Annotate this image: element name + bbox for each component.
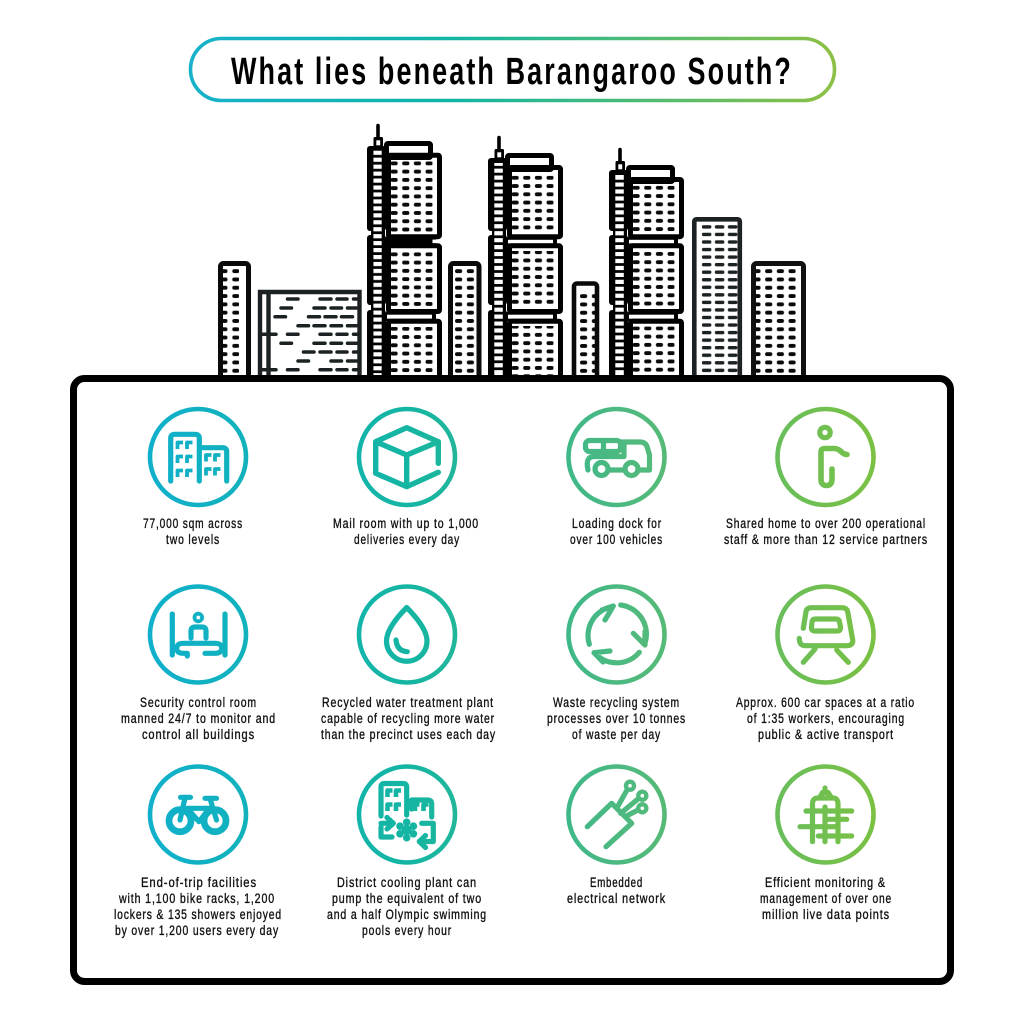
caption: by over 1,200 users every day [115, 923, 279, 938]
caption: 77,000 sqm across [143, 516, 243, 531]
item: waste recycling [547, 586, 686, 742]
caption: End-of-trip facilities [141, 875, 257, 890]
icon: water drop [386, 608, 427, 661]
item: district cooling [327, 766, 487, 938]
caption [327, 875, 487, 938]
title pill [190, 38, 834, 100]
icon: recycling arrows [588, 605, 646, 663]
item: end-of-trip facilities [114, 766, 282, 938]
caption: Mail room with up to 1,000 [333, 516, 479, 531]
caption [760, 875, 892, 922]
caption: Security control room [140, 695, 257, 710]
caption [321, 695, 496, 742]
icon: snowflake [396, 818, 417, 842]
caption: pump the equivalent of two [332, 891, 482, 906]
caption [333, 516, 479, 547]
icon: bicycle [169, 797, 226, 832]
building A [220, 264, 248, 378]
icon: box [376, 428, 438, 487]
item: electrical network [567, 766, 666, 906]
caption: Embedded [590, 875, 643, 890]
caption: management of over one [760, 891, 892, 906]
caption: electrical network [567, 891, 666, 906]
caption: staff & more than 12 service partners [724, 532, 928, 547]
caption: Recycled water treatment plant [322, 695, 494, 710]
title: What lies beneath Barangaroo South? [231, 51, 793, 93]
tower 3 [609, 150, 682, 381]
building D [574, 284, 598, 378]
icon: buildings [171, 434, 227, 481]
caption [547, 695, 686, 742]
icon: train [799, 608, 853, 662]
icon: cables [587, 782, 646, 847]
caption: District cooling plant can [337, 875, 477, 890]
building F [753, 264, 804, 378]
caption: Approx. 600 car spaces at a ratio [736, 695, 915, 710]
icon: building with data lines [800, 788, 852, 842]
caption: capable of recycling more water [321, 711, 495, 726]
caption: and a half Olympic swimming [327, 907, 487, 922]
icon: person [820, 427, 847, 486]
caption: over 100 vehicles [570, 532, 663, 547]
main panel [74, 378, 950, 982]
caption [114, 875, 282, 938]
caption: with 1,100 bike racks, 1,200 [118, 891, 275, 906]
caption [724, 516, 928, 547]
item: security control room [121, 586, 276, 742]
item: water treatment [321, 586, 496, 742]
item: floor area [143, 409, 246, 547]
icon: security desk [172, 614, 225, 656]
tower 1 [367, 126, 440, 381]
caption [143, 516, 243, 547]
caption: Efficient monitoring & [765, 875, 886, 890]
building B with scattered windows [260, 292, 360, 378]
building E [694, 219, 740, 379]
building C [450, 264, 479, 378]
icon: truck [586, 440, 650, 476]
caption [736, 695, 915, 742]
caption: than the precinct uses each day [321, 727, 496, 742]
caption: Waste recycling system [553, 695, 680, 710]
caption [570, 516, 663, 547]
icon: cooling plant [381, 784, 433, 848]
tower 2 [488, 138, 560, 381]
caption: deliveries every day [354, 532, 460, 547]
caption: of waste per day [572, 727, 661, 742]
caption [567, 875, 666, 906]
caption: of 1:35 workers, encouraging [747, 711, 905, 726]
caption: control all buildings [142, 727, 255, 742]
caption: Shared home to over 200 operational [726, 516, 926, 531]
item: operational staff [724, 409, 928, 547]
caption: pools every hour [362, 923, 452, 938]
caption: million live data points [762, 907, 890, 922]
item: car spaces [736, 586, 915, 742]
caption: manned 24/7 to monitor and [121, 711, 276, 726]
item: loading dock [568, 409, 664, 547]
caption: public & active transport [758, 727, 894, 742]
item: data points [760, 766, 892, 922]
skyline illustration [220, 126, 804, 381]
caption: Loading dock for [572, 516, 662, 531]
caption [121, 695, 276, 742]
item: mail room [333, 409, 479, 547]
caption: two levels [166, 532, 220, 547]
caption: lockers & 135 showers enjoyed [114, 907, 282, 922]
caption: processes over 10 tonnes [547, 711, 686, 726]
